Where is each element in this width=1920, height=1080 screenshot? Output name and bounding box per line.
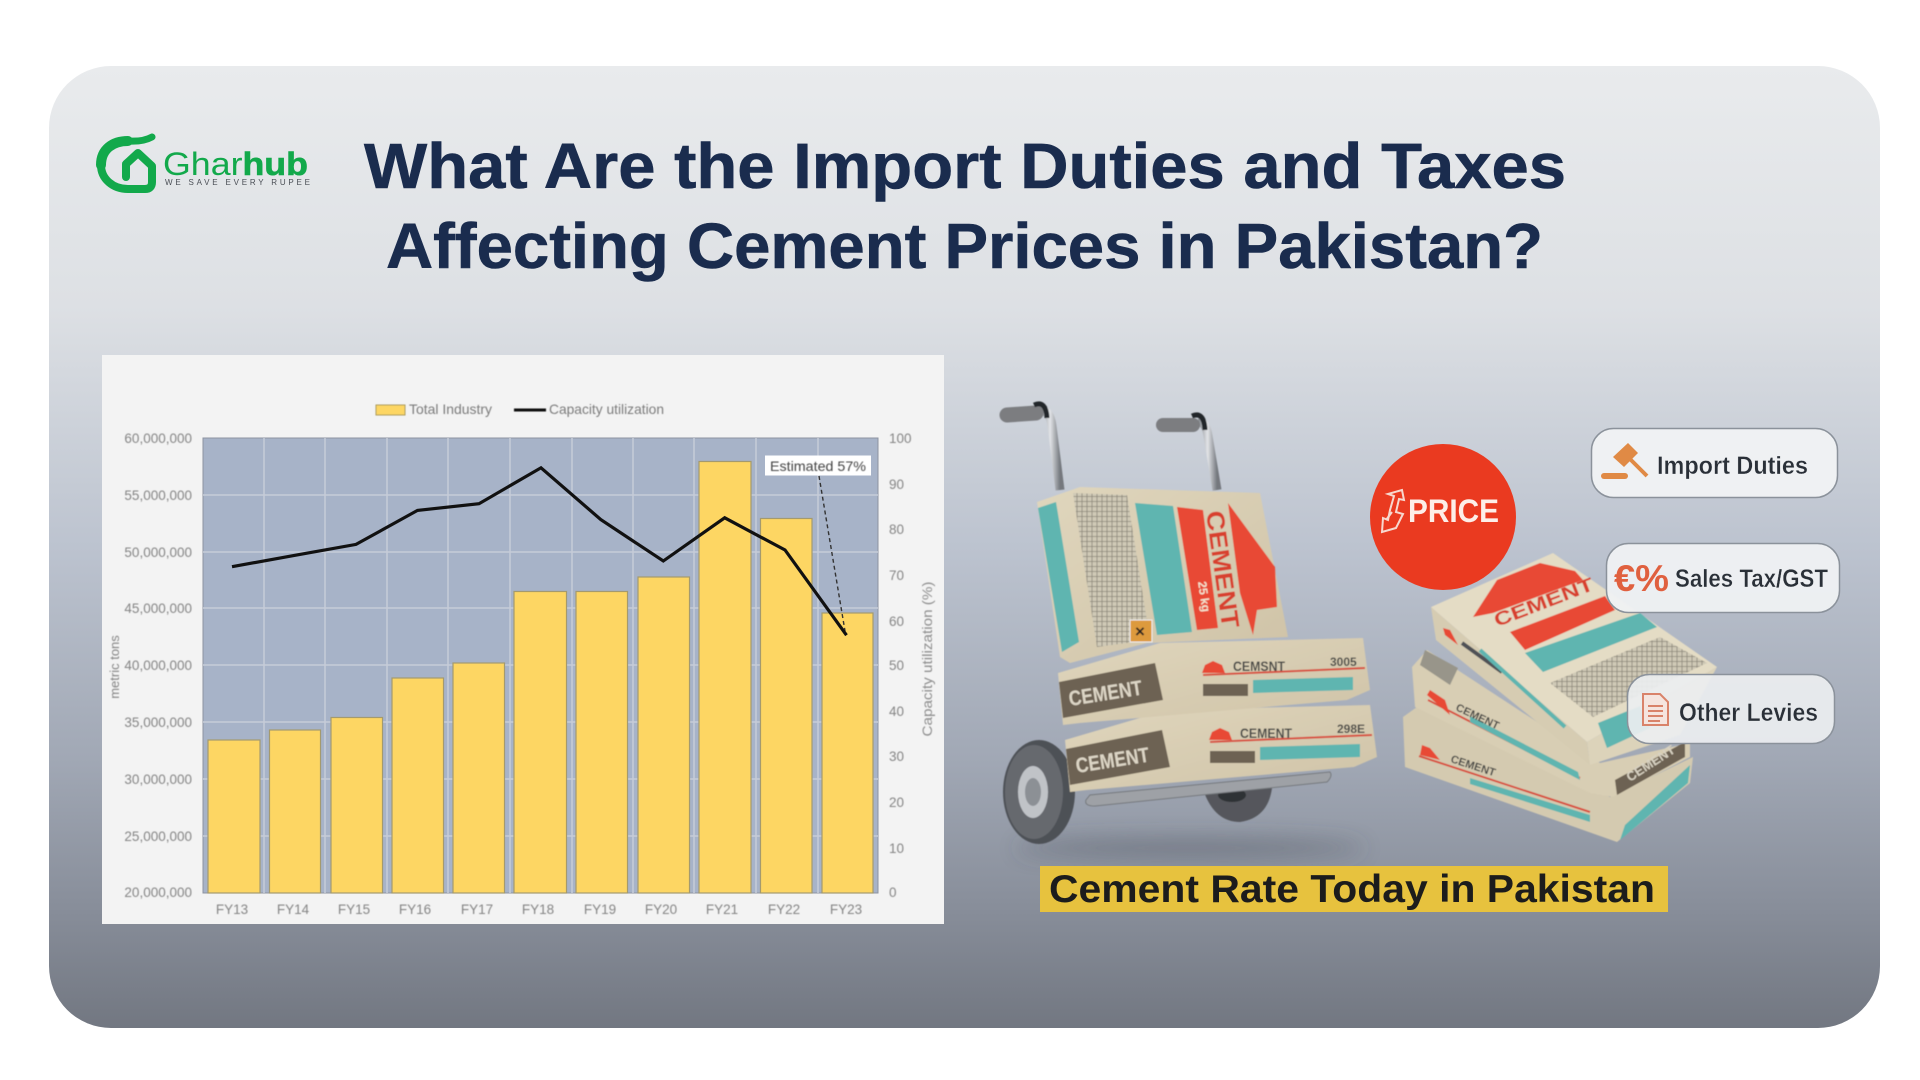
- bag: middle flat bag: CEMENT: [1067, 677, 1144, 711]
- front wheel: [1003, 740, 1075, 844]
- left axis labels: 60,000,000: [124, 431, 192, 446]
- panel: bar and line chart: [102, 355, 944, 924]
- bag: stack top: [1431, 553, 1717, 765]
- price label: PRICE: [1408, 493, 1499, 529]
- bag: middle flat bag: [1058, 638, 1370, 725]
- tagline: WE SAVE EVERY RUPEE: [165, 178, 310, 187]
- annotation: Estimated 57%: [765, 456, 871, 631]
- bars: total industry: [208, 462, 873, 893]
- callout: sales tax: [1606, 544, 1840, 612]
- x axis labels: FY13: [216, 902, 248, 917]
- chart legend: Total Industry: [409, 401, 492, 417]
- bag: bottom flat bag: 298E: [1337, 722, 1365, 736]
- hand truck handles: [1007, 404, 1217, 490]
- bag: upright top bag: ×: [1135, 622, 1145, 641]
- bag: upright top bag: 25 kg: [1195, 580, 1213, 613]
- right axis labels: 30: [889, 749, 904, 764]
- ground shadow: [1015, 838, 1365, 858]
- x axis labels: [216, 902, 862, 917]
- x axis labels: FY18: [522, 902, 554, 917]
- right axis labels: 80: [889, 522, 904, 537]
- callout: sales tax: Sales Tax/GST: [1675, 565, 1828, 593]
- bag: bottom flat bag: CEMENT: [1074, 744, 1151, 778]
- bag: stack bottom: CEMENT: [1449, 753, 1497, 779]
- title: Affecting Cement Prices in Pakistan?: [386, 210, 1543, 282]
- brand name: Ghar hub: [163, 146, 308, 182]
- left axis labels: 50,000,000: [124, 545, 192, 560]
- plot background and gridlines: [203, 438, 878, 893]
- right axis labels: 100: [889, 431, 912, 446]
- left axis labels: 20,000,000: [124, 885, 192, 900]
- caption banner: Cement Rate Today in Pakistan: [1049, 868, 1655, 911]
- left axis labels: [124, 431, 192, 900]
- bag: stack middle: CEMENT: [1454, 702, 1501, 732]
- bag: middle flat bag: CEMSNT: [1233, 658, 1285, 674]
- bag: upright top bag: CEMENT: [1200, 509, 1244, 630]
- x axis labels: FY19: [584, 902, 616, 917]
- logo: Gharhub: [101, 137, 310, 189]
- chart legend: Capacity utilization: [549, 401, 664, 417]
- bag: stack middle: CEMENT: [1623, 742, 1678, 785]
- callout: import duties: Import Duties: [1657, 452, 1808, 480]
- right axis labels: 0: [889, 885, 897, 900]
- right axis labels: 60: [889, 614, 904, 629]
- right axis labels: [889, 431, 912, 900]
- bag: stack middle: [1412, 650, 1690, 797]
- x axis labels: FY23: [830, 902, 862, 917]
- bag: stack bottom: [1403, 707, 1693, 842]
- left axis labels: 45,000,000: [124, 601, 192, 616]
- line: capacity utilization: [232, 468, 846, 635]
- illustration: stacked cement bags: [1403, 553, 1717, 842]
- callout: other levies: Other Levies: [1679, 699, 1818, 727]
- icon: price arrows: [1382, 490, 1404, 532]
- price badge: [1370, 444, 1516, 590]
- icon: euro percent: €%: [1614, 558, 1669, 599]
- icon: green house G: [101, 137, 152, 189]
- x axis labels: FY15: [338, 902, 370, 917]
- right axis labels: 50: [889, 658, 904, 673]
- bag: bottom flat bag: [1065, 705, 1377, 792]
- left axis title: metric tons: [107, 635, 122, 699]
- x axis labels: FY14: [277, 902, 310, 917]
- icon: gavel: [1601, 443, 1647, 479]
- right axis labels: 70: [889, 568, 904, 583]
- callout: other levies: [1628, 674, 1834, 744]
- bag: bottom flat bag: CEMENT: [1240, 725, 1292, 741]
- right axis labels: 90: [889, 477, 904, 492]
- icon: document: [1643, 694, 1668, 725]
- bag: upright top bag: [1037, 487, 1288, 663]
- x axis labels: FY17: [461, 902, 493, 917]
- left axis labels: 55,000,000: [124, 488, 192, 503]
- rear wheel and platform: [1204, 788, 1272, 822]
- right axis labels: 40: [889, 704, 904, 719]
- callout: import duties: [1592, 428, 1838, 498]
- bag: middle flat bag: 3005: [1330, 655, 1357, 669]
- illustration: hand truck with cement bags: [1003, 404, 1377, 858]
- right axis labels: 10: [889, 841, 904, 856]
- left axis labels: 35,000,000: [124, 715, 192, 730]
- left axis labels: 25,000,000: [124, 829, 192, 844]
- x axis labels: FY21: [706, 902, 738, 917]
- title: [364, 130, 1566, 282]
- left axis labels: 30,000,000: [124, 772, 192, 787]
- title: What Are the Import Duties and Taxes: [364, 130, 1566, 202]
- left axis labels: 40,000,000: [124, 658, 192, 673]
- x axis labels: FY22: [768, 902, 800, 917]
- right axis labels: 20: [889, 795, 904, 810]
- chart legend: [376, 401, 664, 417]
- x axis labels: FY20: [645, 902, 677, 917]
- annotation: Estimated 57%: Estimated 57%: [770, 458, 866, 474]
- x axis labels: FY16: [399, 902, 431, 917]
- bag: stack top: CEMENT: [1491, 574, 1597, 632]
- right axis title: Capacity utilization (%): [919, 582, 935, 736]
